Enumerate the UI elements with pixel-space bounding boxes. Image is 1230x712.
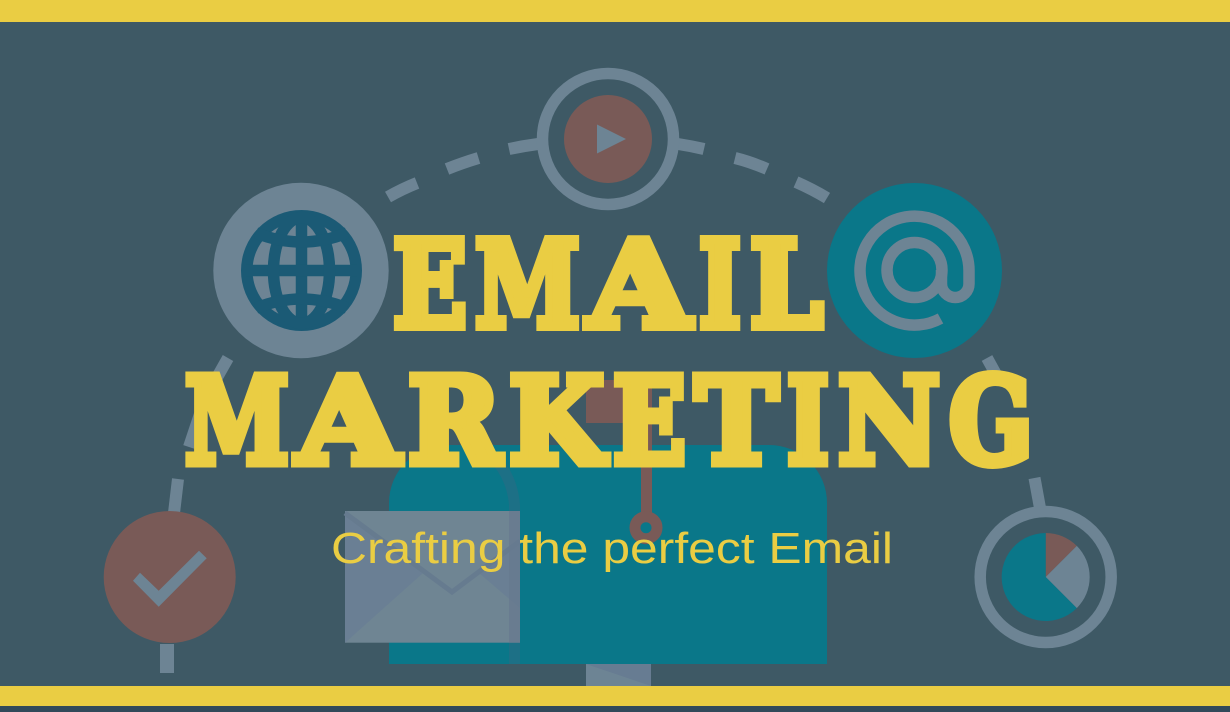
icon: pie chart xyxy=(980,512,1111,642)
mailbox flag and ring xyxy=(586,380,657,539)
title line: MARKETING: M xyxy=(185,352,289,492)
mailbox door edge xyxy=(488,452,514,664)
title line: MARKETING: A xyxy=(296,352,401,492)
title line: EMAIL: A xyxy=(587,216,692,356)
title line: MARKETING: E xyxy=(613,352,686,492)
title line: MARKETING: I xyxy=(787,352,829,492)
top yellow bar xyxy=(0,0,1230,22)
dashed arc connecting the icons xyxy=(167,144,1040,673)
icon: play button xyxy=(542,74,674,204)
title line: MARKETING: T xyxy=(695,352,778,492)
title line: EMAIL: I xyxy=(699,216,741,356)
title line: MARKETING: G xyxy=(949,352,1033,492)
icon: check mark xyxy=(104,511,236,643)
title line: EMAIL: M xyxy=(475,216,580,356)
mailbox post xyxy=(586,664,651,686)
bottom yellow bar xyxy=(0,686,1230,706)
subtitle: Crafting the perfect Email xyxy=(331,524,893,573)
mailbox body xyxy=(389,445,827,664)
title line: EMAIL: L xyxy=(750,216,823,356)
title line: MARKETING: N xyxy=(838,352,940,492)
title line: EMAIL: E xyxy=(393,216,467,356)
title line: MARKETING: K xyxy=(509,352,608,492)
icon: globe xyxy=(213,183,389,358)
icon: envelope xyxy=(345,511,520,643)
title line: MARKETING: R xyxy=(408,352,502,492)
illustration: mailbox xyxy=(389,380,827,686)
icon: at sign xyxy=(827,183,1002,358)
title xyxy=(185,216,1033,492)
